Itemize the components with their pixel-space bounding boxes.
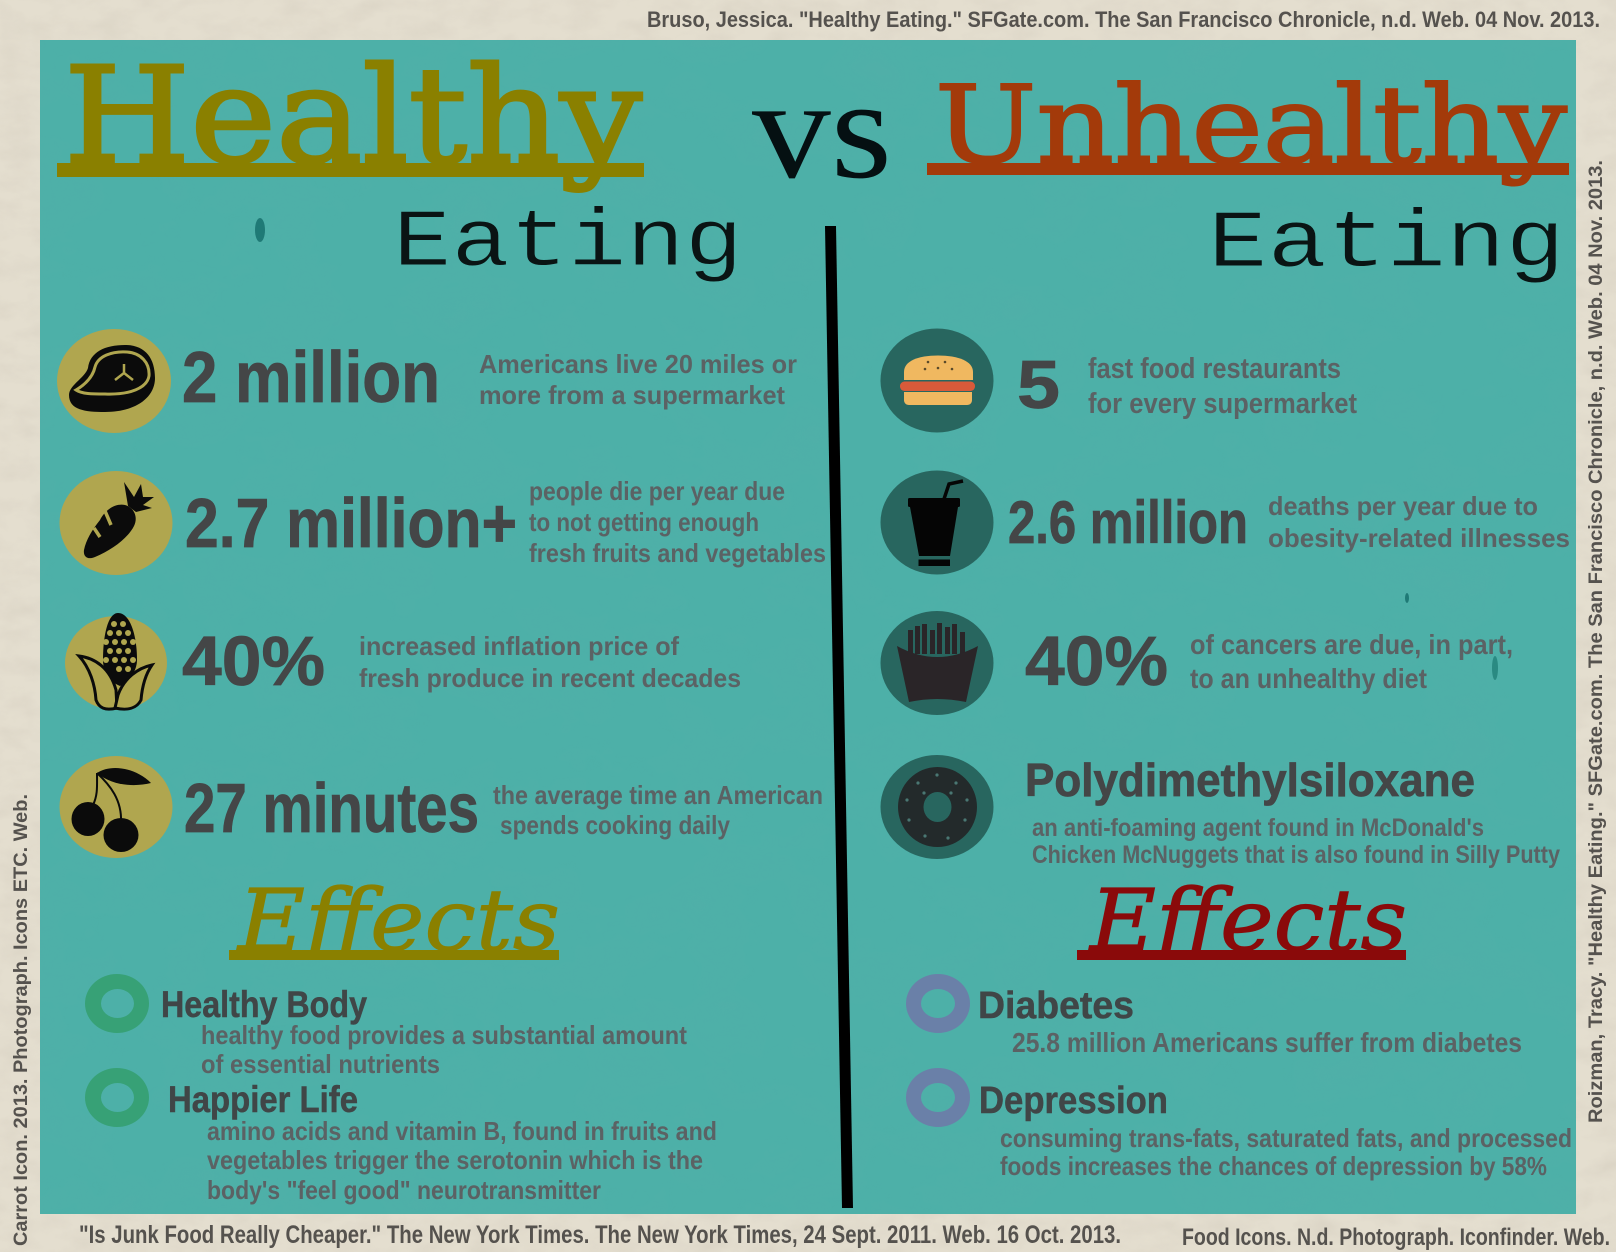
icon: carrot [60, 471, 172, 575]
bullet: healthy body [85, 974, 149, 1033]
text: cooking time: the average time an American [493, 780, 823, 810]
text: serotonin: amino acids and vitamin B, found in fruits and [207, 1116, 717, 1146]
text: nutrients [201, 1020, 687, 1079]
stat: 27 minutes: 27 minutes [184, 769, 479, 847]
text: fast food ratio: fast food restaurants [1088, 353, 1341, 385]
text: nutrients: of essential nutrients [201, 1049, 440, 1079]
text: nutrients: healthy food provides a substantial amount [201, 1020, 687, 1050]
text: supermarket distance: more from a supermarket [479, 380, 785, 410]
text: cancers: of cancers are due, in part, [1190, 629, 1513, 660]
text: fast food ratio [1088, 353, 1357, 420]
stat: 2 million: 2 million [182, 338, 440, 418]
text: serotonin: body's "feel good" neurotransmitter [207, 1175, 601, 1205]
icon: steak [57, 329, 171, 433]
panel: unhealthy stats [880, 328, 1570, 869]
heading: Depression: Depression [979, 1080, 1168, 1122]
panel: healthy effects [85, 872, 717, 1205]
bullet: diabetes [906, 974, 970, 1033]
heading: Happier Life: Happier Life [168, 1079, 358, 1120]
heading: Effects: Effects [1088, 872, 1407, 971]
subtitle: Eating right: Eating [1208, 198, 1565, 291]
icon: soda cup [880, 470, 994, 574]
stat: 40%: 40% [182, 622, 325, 700]
text: obesity deaths: deaths per year due to [1268, 491, 1538, 521]
text: deaths from lack of produce [529, 476, 826, 568]
bullet: happier life [85, 1068, 149, 1127]
text: cooking time [493, 780, 823, 840]
text: inflation: fresh produce in recent decades [359, 663, 741, 693]
text: cooking time: spends cooking daily [500, 810, 730, 840]
center divider [825, 226, 853, 1208]
title: Healthy: Healthy [64, 40, 642, 194]
heading: Healthy Body: Healthy Body [161, 984, 367, 1025]
text: serotonin [207, 1116, 717, 1205]
text: depression stat: foods increases the chances of depression by 58% [1000, 1151, 1547, 1181]
bullet: depression [906, 1068, 970, 1127]
title: Unhealthy: Unhealthy [935, 64, 1568, 188]
citation: right vertical: Roizman, Tracy. "Healthy Eating." SFGate.com. The San Francisco Chronicle, n.d. Web. 04 Nov. 2013. [1586, 160, 1607, 1123]
heading: Effects: Effects [236, 872, 560, 971]
text: cancers [1190, 629, 1513, 694]
text: deaths from lack of produce: fresh fruits and vegetables [529, 538, 826, 568]
text: cancers: to an unhealthy diet [1190, 663, 1427, 694]
text: inflation: increased inflation price of [359, 631, 679, 661]
text: inflation [359, 631, 741, 693]
stat: Polydimethylsiloxane: Polydimethylsiloxane [1025, 754, 1475, 806]
text: PDMS description [1032, 814, 1560, 869]
text: depression stat [1000, 1123, 1572, 1181]
heading: Diabetes: Diabetes [978, 985, 1134, 1027]
stat: 5: 5 [1017, 347, 1060, 423]
text: deaths from lack of produce: to not getting enough [529, 507, 759, 537]
text: diabetes stat: 25.8 million Americans suffer from diabetes [1012, 1027, 1522, 1058]
title: vs: vs [752, 50, 892, 208]
text: supermarket distance [479, 349, 797, 410]
text: fast food ratio: for every supermarket [1088, 388, 1357, 420]
stat: 2.7 million+: 2.7 million+ [185, 484, 517, 562]
text: PDMS description: an anti-foaming agent found in McDonald's [1032, 814, 1484, 842]
text: obesity deaths: obesity-related illnesses [1268, 523, 1570, 553]
icon: cherries [60, 756, 172, 858]
stat: 2.6 million: 2.6 million [1008, 489, 1248, 556]
icon: burger [880, 328, 994, 432]
text: supermarket distance: Americans live 20 miles or [479, 349, 797, 379]
text: obesity deaths [1268, 491, 1570, 553]
citation: bottom left: "Is Junk Food Really Cheaper." The New York Times. The New York Times, 24 Sept. 2011. Web. 16 Oct. 2013. [79, 1221, 1121, 1249]
citation: left vertical: Carrot Icon. 2013. Photograph. Icons ETC. Web. [11, 794, 32, 1246]
icon: donut [880, 755, 994, 859]
panel: healthy stats [57, 329, 826, 858]
stat: 40%: 40% [1025, 622, 1168, 700]
icon: corn [65, 613, 167, 710]
icon: fries [880, 611, 994, 715]
panel: unhealthy effects [906, 872, 1572, 1181]
text: serotonin: vegetables trigger the serotonin which is the [207, 1145, 703, 1175]
text: deaths from lack of produce: people die per year due [529, 476, 785, 506]
subtitle: Eating left: Eating [393, 197, 743, 290]
